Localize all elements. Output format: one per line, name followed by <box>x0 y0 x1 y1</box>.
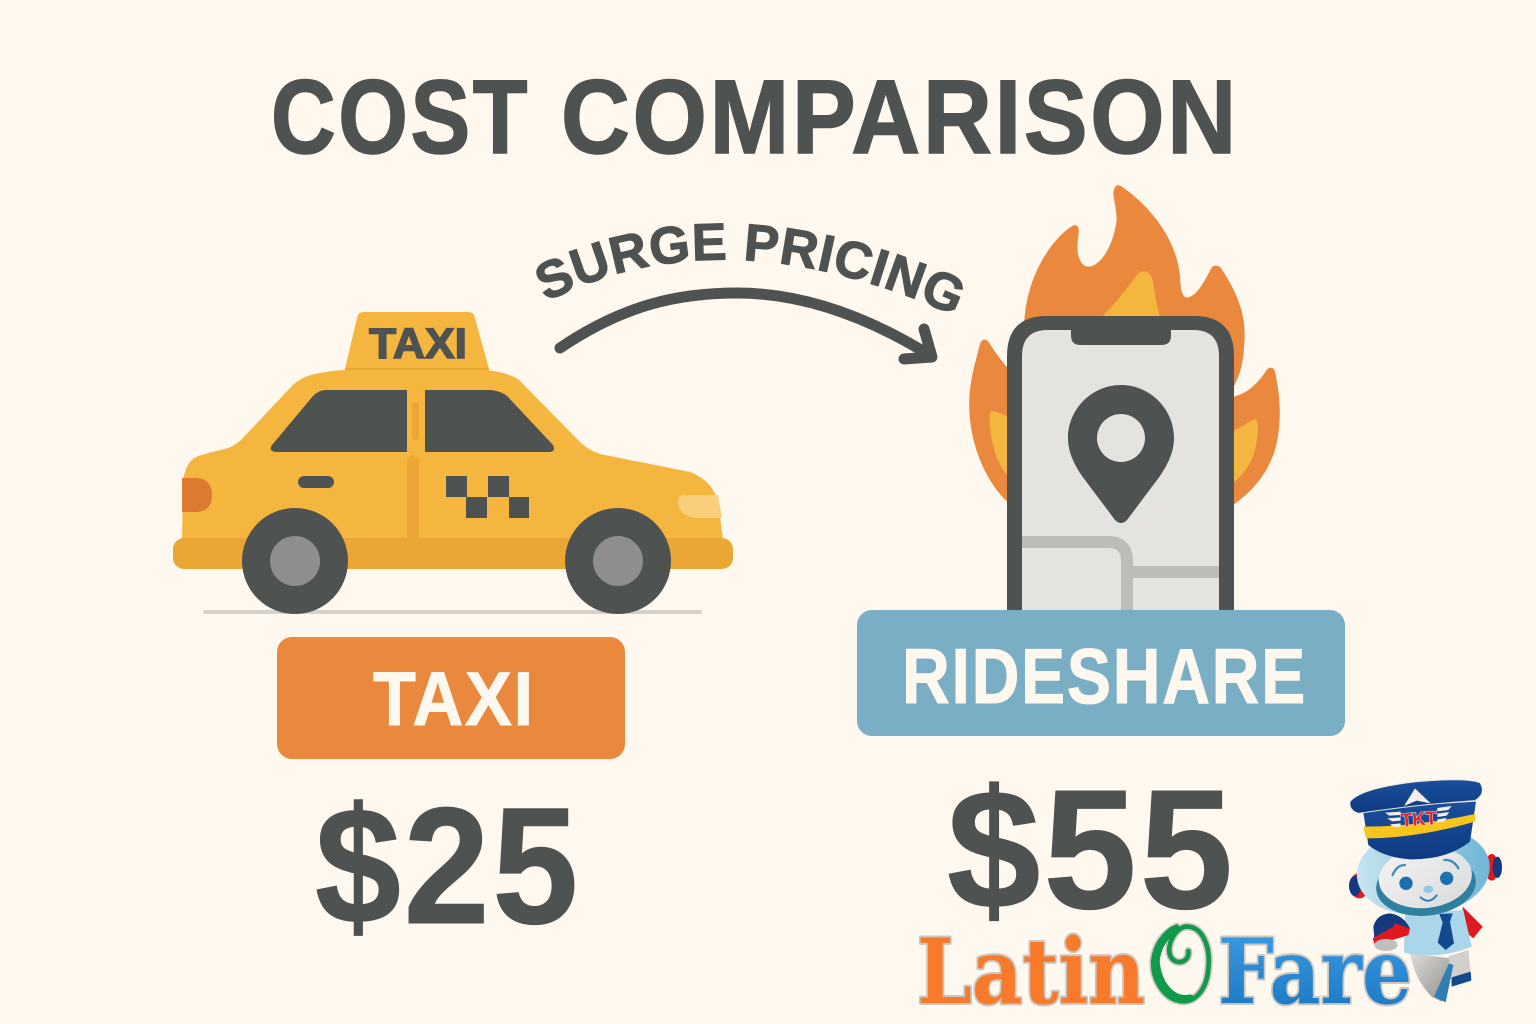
mascot helmet rim <box>1373 849 1479 921</box>
mascot hat band <box>1363 802 1476 859</box>
logo word: Fare: Fare <box>1218 919 1412 1024</box>
mascot helmet <box>1352 820 1494 922</box>
taxi roof sign: TAXI <box>369 320 467 368</box>
taxi roof sign <box>345 312 489 373</box>
checker pattern <box>446 476 529 518</box>
icon: flames and phone <box>969 185 1280 612</box>
phone body <box>1007 316 1234 612</box>
arrow: taxi to rideshare <box>560 293 932 359</box>
logo swirl O <box>1153 927 1209 1001</box>
mascot left arm <box>1373 913 1410 951</box>
price: taxi: $25 <box>315 774 581 959</box>
mascot legs <box>1410 950 1471 1002</box>
rear wheel <box>242 508 348 614</box>
mascot: ticket conductor <box>1349 780 1502 1002</box>
price: rideshare: $55 <box>947 755 1236 945</box>
mascot face <box>1376 842 1475 913</box>
mascot ears <box>1349 854 1502 898</box>
mascot body <box>1404 910 1472 955</box>
phone notch <box>1071 328 1171 345</box>
rear window <box>271 390 407 452</box>
mascot hat brim top <box>1350 780 1482 813</box>
door handle <box>298 476 334 488</box>
flames <box>969 185 1280 506</box>
badge: taxi <box>277 637 625 759</box>
logo word: Latin: Latin <box>917 919 1145 1024</box>
map roads <box>1022 542 1219 612</box>
ground line <box>203 610 702 614</box>
icon: taxi car <box>173 312 733 614</box>
door pillar <box>412 402 419 440</box>
mascot hat chevrons <box>1385 806 1452 827</box>
badge: taxi: TAXI <box>373 657 535 742</box>
title: COST <box>271 59 530 176</box>
mascot right arm <box>1463 907 1483 938</box>
badge: rideshare: RIDESHARE <box>902 632 1307 720</box>
title: COMPARISON <box>561 59 1239 176</box>
phone screen <box>1022 330 1219 612</box>
car bumper <box>173 538 733 569</box>
mascot hat emblem <box>1404 788 1431 806</box>
door line <box>407 455 419 538</box>
tail light <box>182 478 212 512</box>
car body <box>182 370 723 540</box>
badge: rideshare <box>857 610 1345 736</box>
mascot eyes and smile <box>1393 860 1458 901</box>
mascot tie <box>1438 913 1454 950</box>
logo: LatinOFare <box>917 919 1412 1024</box>
mascot hat yellow stripe <box>1363 814 1475 838</box>
map pin <box>1068 385 1174 523</box>
label: surge pricing: SURGE PRICING <box>536 223 963 312</box>
mascot hat text: TKT <box>1400 807 1438 831</box>
title <box>271 59 1239 176</box>
front wheel <box>565 508 671 614</box>
head light <box>678 495 722 518</box>
front window <box>425 390 554 452</box>
